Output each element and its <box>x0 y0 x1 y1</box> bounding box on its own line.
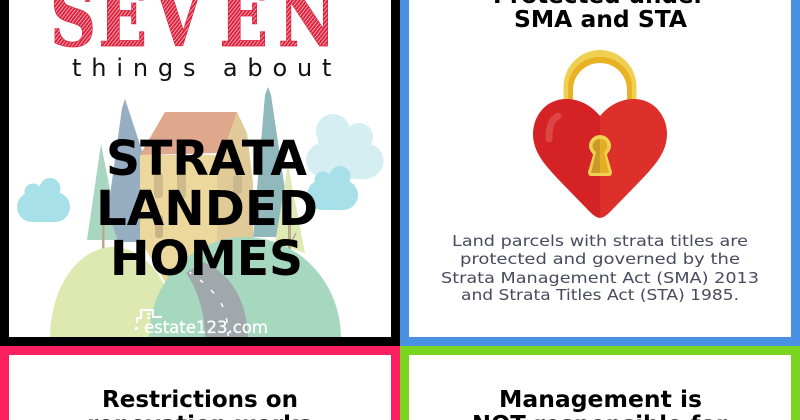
heading: SMA and STA <box>514 5 688 33</box>
cover title: STRATA LANDED HOMES: STRATA <box>106 131 307 187</box>
cloud: blue left <box>17 178 70 222</box>
cover subheading: things about <box>72 54 341 82</box>
tree: left green <box>87 144 118 248</box>
cover title: STRATA LANDED HOMES: HOMES <box>110 231 303 287</box>
heading: Management is <box>499 385 702 413</box>
panel: management is not responsible <box>400 346 800 420</box>
heading <box>472 385 727 420</box>
cover title: STRATA LANDED HOMES <box>96 131 318 287</box>
heading: Restrictions on <box>102 385 298 413</box>
body text: Land parcels with strata titles are <box>452 232 748 250</box>
logo: estate123.com: estate123.com <box>144 318 268 338</box>
tree: teal <box>253 87 284 237</box>
hill: left <box>50 247 164 337</box>
cover title: STRATA LANDED HOMES: LANDED <box>96 181 318 237</box>
illustration: houses on hills <box>17 87 384 337</box>
panel: restrictions on renovation works <box>0 346 400 420</box>
icon: heart padlock <box>533 50 667 218</box>
body text: protected and governed by the <box>460 250 740 268</box>
tree: right yellow-green <box>275 168 305 253</box>
road <box>186 262 248 337</box>
house <box>140 112 253 290</box>
panel: protected under SMA and STA <box>400 0 800 346</box>
body text: and Strata Titles Act (STA) 1985. <box>461 286 739 304</box>
panel: cover <box>0 0 400 346</box>
logo: estate123.com <box>135 310 268 338</box>
hill: right <box>149 237 341 337</box>
cloud: pale right <box>306 114 384 179</box>
body text <box>441 232 759 304</box>
cloud: blue right <box>307 166 358 210</box>
body text: Strata Management Act (SMA) 2013 <box>441 269 759 287</box>
tree: blue <box>108 99 145 242</box>
heading <box>493 0 705 33</box>
